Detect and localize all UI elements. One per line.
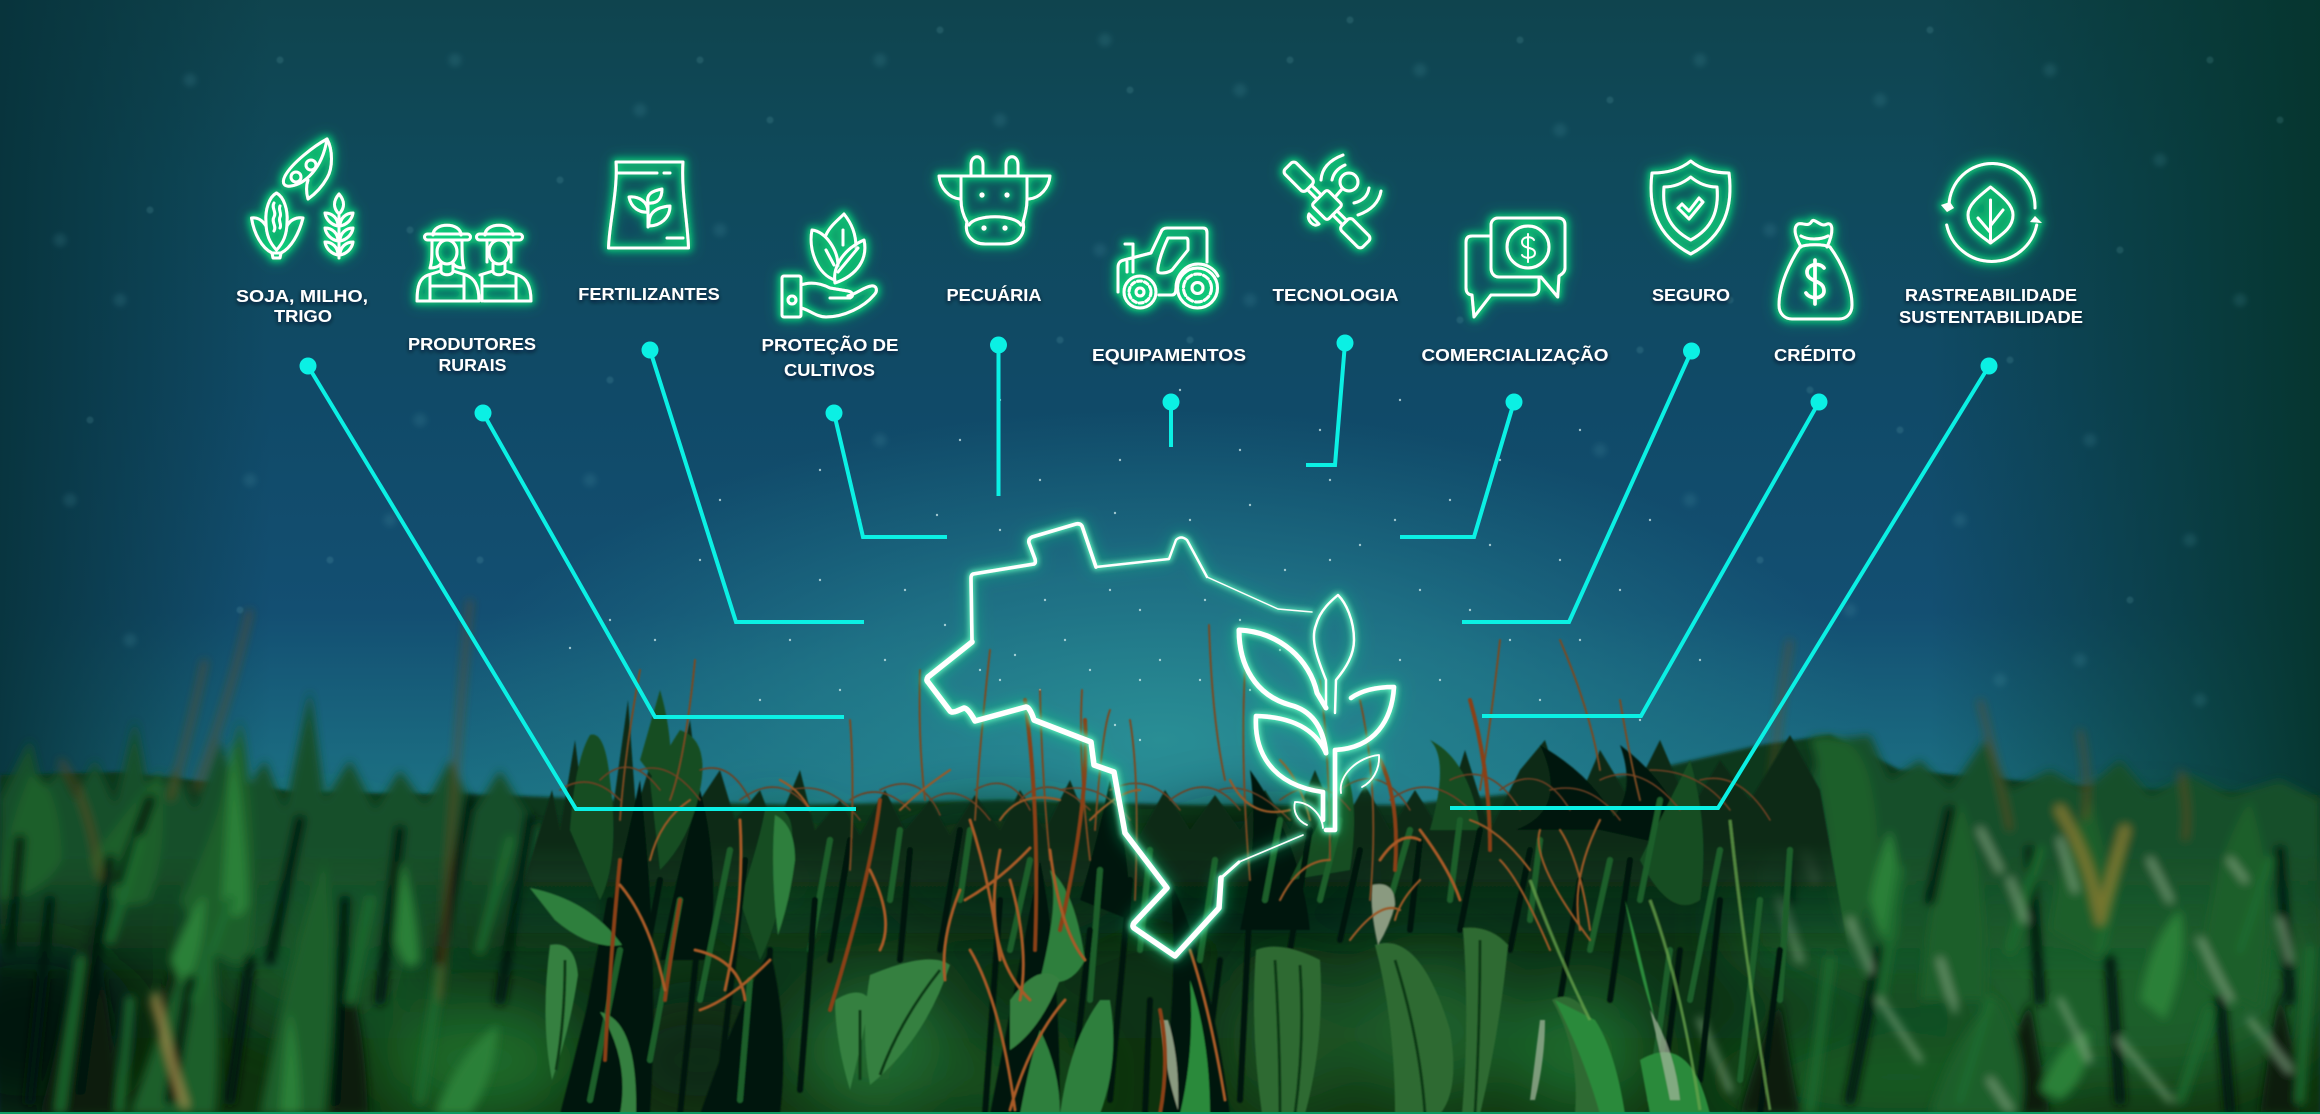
item: Soja, Milho, Trigo xyxy=(236,139,856,809)
icon: fertilizer bag xyxy=(608,162,688,248)
low frequency light xyxy=(0,820,2320,1114)
connector: Seguro xyxy=(1462,342,1700,622)
icon: chat bubbles with dollar xyxy=(1466,218,1565,317)
item: Fertilizantes xyxy=(578,162,864,622)
item: Tecnologia xyxy=(1272,155,1399,465)
label: Proteção de Cultivos xyxy=(762,334,898,380)
connector: Crédito xyxy=(1482,394,1828,716)
central illustration: Brazil map and sprout xyxy=(927,524,1394,956)
label: Produtores Rurais xyxy=(408,334,536,375)
sprout xyxy=(1239,595,1394,830)
label: Tecnologia: TECNOLOGIA xyxy=(1272,285,1399,305)
label: Proteção de Cultivos: CULTIVOS xyxy=(784,360,875,380)
background: corn field xyxy=(0,600,2320,1114)
label: Seguro: SEGURO xyxy=(1652,285,1730,305)
item: Seguro xyxy=(1462,161,1730,622)
item: Comercialização xyxy=(1400,218,1608,537)
connector: Soja xyxy=(300,358,856,809)
connector: Produtores xyxy=(474,404,844,717)
label: Soja, Milho, Trigo: TRIGO xyxy=(274,306,332,326)
connector: Proteção xyxy=(826,404,947,537)
label: Equipamentos: EQUIPAMENTOS xyxy=(1092,345,1246,365)
stars: soft bokeh xyxy=(60,40,2240,700)
label: Rastreabilidade Sustentabilidade xyxy=(1899,285,2083,327)
label: Proteção de Cultivos: PROTEÇÃO DE xyxy=(762,334,898,355)
icon: satellite xyxy=(1280,155,1381,252)
label: Pecuária: PECUÁRIA xyxy=(946,284,1042,305)
corn tassels xyxy=(560,625,1770,1114)
label: Soja, Milho, Trigo xyxy=(236,286,368,326)
icon: tractor xyxy=(1118,228,1218,308)
connector: Pecuária xyxy=(990,336,1007,496)
connector: Tecnologia xyxy=(1306,334,1354,465)
label: Rastreabilidade Sustentabilidade: SUSTENTABILIDADE xyxy=(1899,307,2083,327)
icon: cow head xyxy=(939,157,1050,244)
item: Crédito xyxy=(1482,220,1856,716)
bottom edge line xyxy=(0,1112,2320,1114)
label: Soja, Milho, Trigo: SOJA, MILHO, xyxy=(236,286,368,306)
label: Crédito: CRÉDITO xyxy=(1774,344,1856,365)
connector: Equipamentos xyxy=(1162,394,1180,447)
connector: Rastreabilidade xyxy=(1450,358,1998,808)
item: Pecuária xyxy=(939,157,1050,496)
connector: Fertilizantes xyxy=(642,342,864,622)
label: Produtores Rurais: RURAIS xyxy=(438,355,506,375)
label: Produtores Rurais: PRODUTORES xyxy=(408,334,536,354)
icon: leaf in recycling arrows xyxy=(1941,164,2042,261)
item: Produtores Rurais xyxy=(408,225,844,717)
label: Rastreabilidade Sustentabilidade: RASTREABILIDADE xyxy=(1905,285,2077,305)
blurred left and right blades xyxy=(0,600,2320,1114)
item: Proteção de Cultivos xyxy=(762,214,947,537)
icon: soybean, corn and wheat xyxy=(252,139,353,258)
item: Rastreabilidade e Sustentabilidade xyxy=(1450,164,2083,808)
map of Brazil outline xyxy=(927,524,1312,956)
connector: Comercialização xyxy=(1400,394,1522,537)
icon: money bag xyxy=(1779,220,1852,319)
label: Comercialização: COMERCIALIZAÇÃO xyxy=(1422,344,1608,365)
item: Equipamentos xyxy=(1092,228,1246,447)
icon: two farmers xyxy=(417,225,531,301)
label: Fertilizantes: FERTILIZANTES xyxy=(578,284,720,304)
icon: shield xyxy=(1651,161,1730,254)
sharper central blades xyxy=(500,690,1850,1114)
icon: hand holding leaves xyxy=(782,214,876,317)
